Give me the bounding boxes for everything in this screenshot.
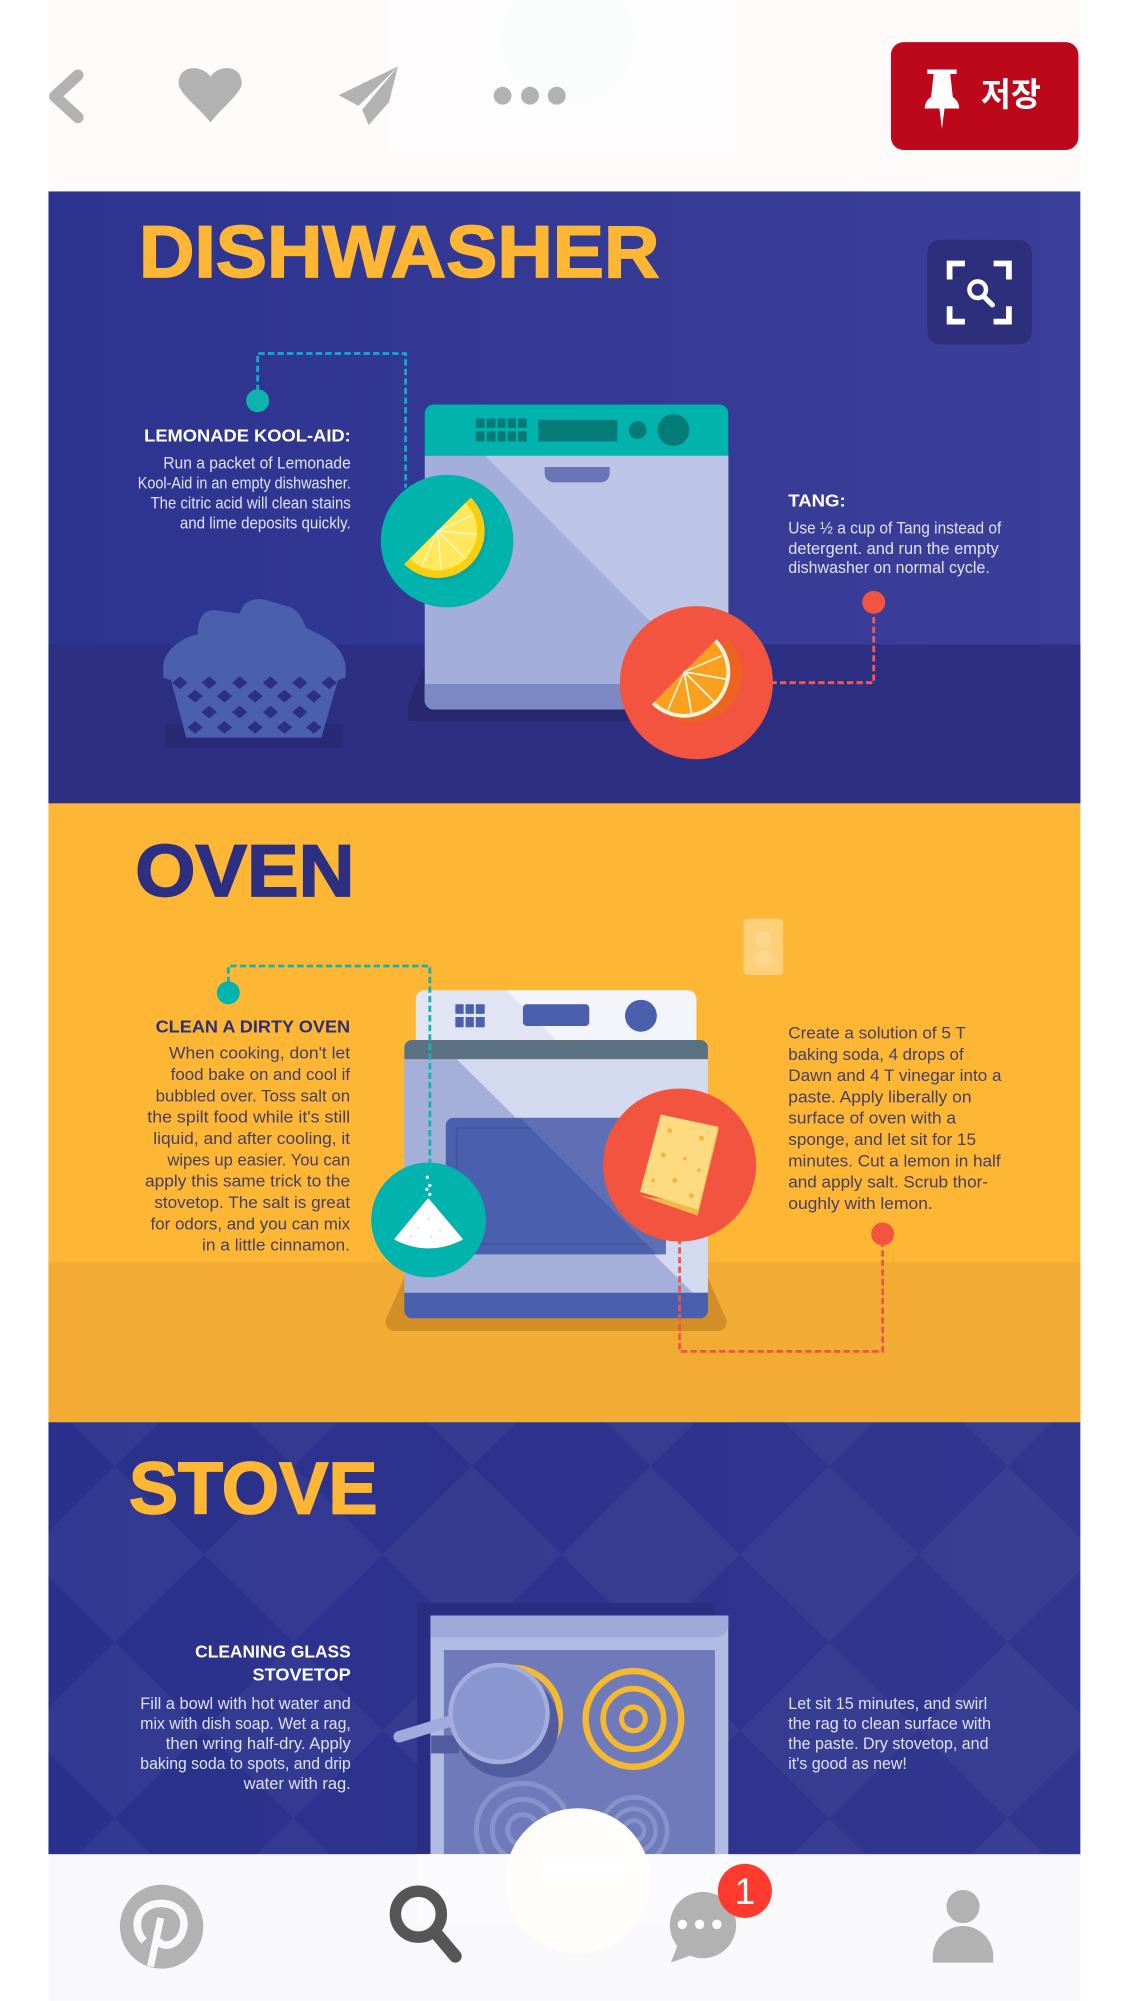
icon: soapy bowl <box>505 1810 651 1955</box>
panel: dishwasher <box>48 191 1080 804</box>
connector: red sponge callout <box>680 1223 894 1351</box>
burner: top left <box>466 1668 560 1762</box>
text: lemonade kool-aid: Run a packet of Lemonade <box>163 454 351 472</box>
text: oven solution: minutes. Cut a lemon in half <box>788 1152 1001 1170</box>
icon: sponge <box>603 1089 756 1242</box>
icon: messages with badge <box>670 1864 772 1963</box>
icon: salt pile <box>371 1163 486 1277</box>
text: tang <box>788 491 1002 577</box>
text: oven solution: paste. Apply liberally on <box>788 1088 972 1106</box>
connector: teal salt callout <box>217 966 430 1165</box>
text: oven solution <box>788 1024 1002 1213</box>
heading: dishwasher: DISHWASHER <box>139 211 659 293</box>
text: stove rinse: the paste. Dry stovetop, and <box>788 1735 989 1753</box>
text: cleaning glass stovetop: then wring half-dry. Apply <box>166 1735 352 1753</box>
text: clean a dirty oven: in a little cinnamon. <box>202 1237 350 1255</box>
save label: 저장 <box>981 77 1041 114</box>
text: tang: TANG: <box>788 491 846 511</box>
text: lemonade kool-aid: The citric acid will clean stains <box>151 495 351 513</box>
save button <box>891 42 1078 150</box>
text: oven solution: and apply salt. Scrub thor- <box>788 1174 988 1192</box>
stovetop appliance <box>399 1603 728 1955</box>
oven appliance <box>386 990 727 1331</box>
text: stove rinse: it's good as new! <box>788 1755 907 1773</box>
text: clean a dirty oven: liquid, and after cooling, it <box>153 1130 351 1148</box>
text: lemonade kool-aid: and lime deposits quickly. <box>180 514 351 532</box>
icon: orange slice <box>620 606 773 759</box>
text: stove rinse <box>788 1695 991 1773</box>
text: cleaning glass stovetop: mix with dish soap. Wet a rag, <box>140 1715 351 1733</box>
text: clean a dirty oven <box>145 1016 351 1255</box>
visual search button <box>927 240 1032 345</box>
text: cleaning glass stovetop <box>140 1642 352 1793</box>
burner: top right <box>586 1671 681 1767</box>
text: cleaning glass stovetop: water with rag. <box>243 1775 351 1793</box>
text: cleaning glass stovetop: baking soda to spots, and drip <box>140 1755 351 1773</box>
icon: lemon slice <box>381 475 513 607</box>
text: tang: Use ½ a cup of Tang instead of <box>788 519 1002 537</box>
heading: stove: STOVE <box>129 1447 378 1529</box>
panel: bottom navigation bar <box>48 1808 1080 2001</box>
text: oven solution: sponge, and let sit for 15 <box>788 1131 976 1149</box>
text: lemonade kool-aid <box>138 426 351 532</box>
text: clean a dirty oven: stovetop. The salt is great <box>154 1194 351 1212</box>
text: lemonade kool-aid: LEMONADE KOOL-AID: <box>144 426 351 446</box>
dishwasher appliance <box>408 405 728 721</box>
text: tang: detergent. and run the empty <box>788 540 1000 558</box>
heading: oven: OVEN <box>135 830 355 912</box>
text: clean a dirty oven: the spilt food while it's still <box>147 1109 350 1127</box>
text: oven solution: surface of oven with a <box>788 1110 957 1128</box>
icon: laundry basket <box>163 599 346 748</box>
icon: profile <box>933 1890 993 1963</box>
text: lemonade kool-aid: Kool-Aid in an empty dishwasher. <box>138 475 351 493</box>
burner: bottom left <box>476 1783 570 1877</box>
burner: bottom right <box>601 1797 667 1864</box>
text: stove rinse: Let sit 15 minutes, and swirl <box>788 1695 987 1713</box>
connector: red orange callout <box>770 591 885 683</box>
text: oven solution: baking soda, 4 drops of <box>788 1046 964 1064</box>
panel: top toolbar <box>48 0 1080 191</box>
text: clean a dirty oven: food bake on and cool if <box>171 1066 351 1084</box>
icon: back chevron <box>55 75 78 117</box>
icon: more dots <box>494 87 566 105</box>
icon: heart <box>179 68 242 123</box>
text: cleaning glass stovetop: Fill a bowl with hot water and <box>140 1695 351 1713</box>
icon: wall outlet <box>744 919 783 975</box>
text: tang: dishwasher on normal cycle. <box>788 559 990 577</box>
icon: search <box>395 1891 455 1956</box>
text: cleaning glass stovetop: CLEANING GLASS <box>195 1642 351 1662</box>
text: clean a dirty oven: CLEAN A DIRTY OVEN <box>156 1016 350 1036</box>
panel: stove <box>48 1422 1080 1955</box>
text: oven solution: oughly with lemon. <box>788 1195 933 1213</box>
text: clean a dirty oven: bubbled over. Toss salt on <box>156 1087 350 1105</box>
connector: teal lemon callout <box>246 353 406 487</box>
text: stove rinse: the rag to clean surface with <box>788 1715 991 1733</box>
panel: oven <box>48 803 1080 1422</box>
notification count: 1 <box>735 1871 755 1912</box>
text: oven solution: Dawn and 4 T vinegar into a <box>788 1067 1002 1085</box>
text: cleaning glass stovetop: STOVETOP <box>253 1665 351 1685</box>
icon: paper plane <box>339 66 398 125</box>
icon: pin <box>925 70 959 129</box>
icon: pinterest logo <box>120 1885 203 1969</box>
text: oven solution: Create a solution of 5 T <box>788 1024 966 1042</box>
text: clean a dirty oven: for odors, and you can mix <box>151 1215 350 1233</box>
text: clean a dirty oven: wipes up easier. You can <box>166 1151 350 1169</box>
icon: frying pan <box>399 1665 559 1778</box>
text: clean a dirty oven: apply this same trick to the <box>145 1173 350 1191</box>
text: clean a dirty oven: When cooking, don't let <box>169 1045 351 1063</box>
